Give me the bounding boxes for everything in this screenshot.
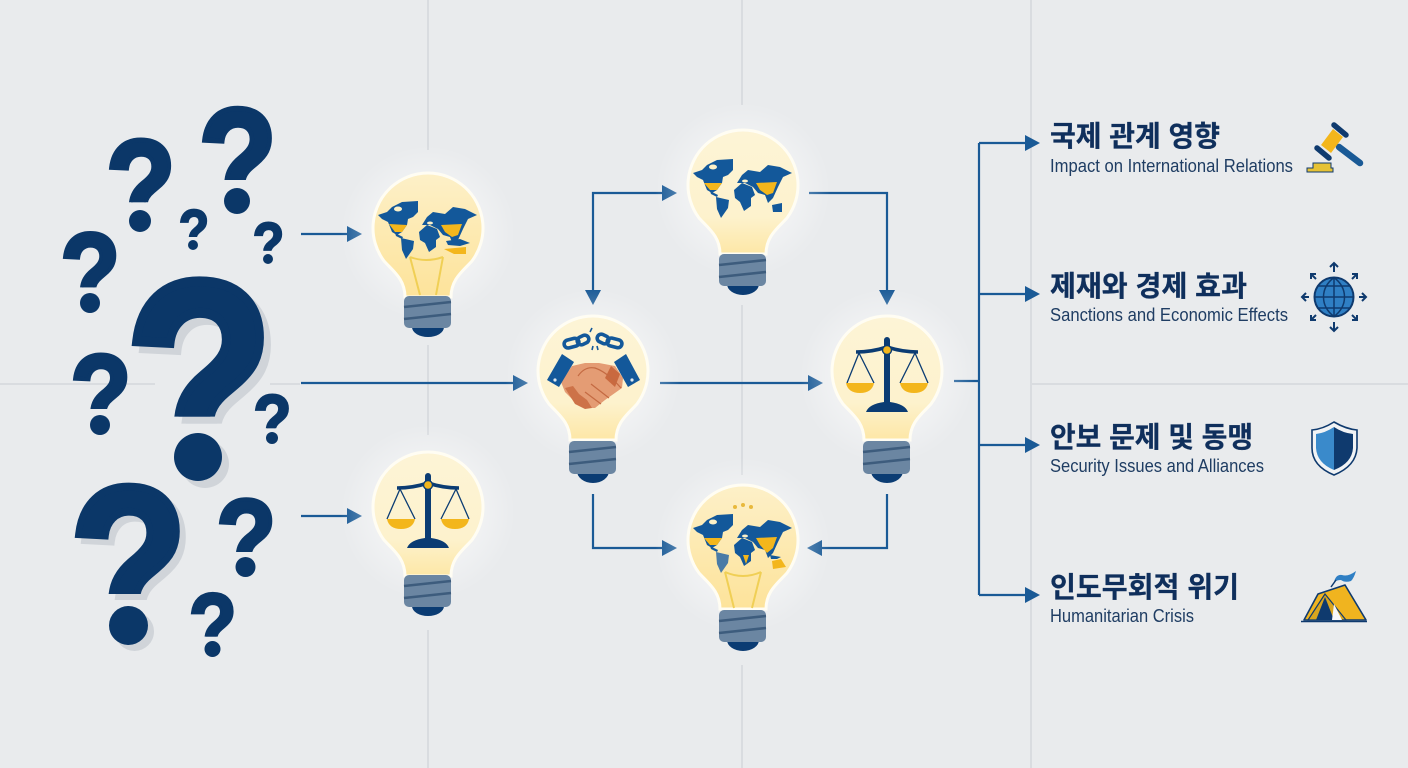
arrow: lower question to bulb — [301, 508, 362, 524]
bulb: scales of justice, lower left — [340, 424, 516, 616]
question mark: lower right — [218, 497, 272, 577]
subheading: Sanctions and Economic Effects — [1050, 305, 1288, 325]
question mark: left middle — [62, 231, 116, 313]
arrow: bottom loop right — [807, 494, 887, 556]
question mark: left lower — [72, 352, 128, 435]
heading: 안보 문제 및 동맹 — [1050, 422, 1253, 454]
question mark: small right: ? — [253, 211, 284, 277]
bulb: world map, bottom centre — [655, 457, 831, 651]
screw base — [719, 254, 766, 295]
subheading: Security Issues and Alliances — [1050, 456, 1264, 476]
question mark: left lower: ? — [70, 330, 131, 460]
question marks cluster — [62, 106, 289, 657]
bulb: handshake with broken chain — [505, 288, 681, 483]
screw base — [863, 441, 910, 483]
question mark: large lower with shadow: ? — [76, 445, 194, 699]
screw base — [569, 441, 616, 483]
world map — [378, 201, 477, 259]
bulb: scales of justice, right — [799, 288, 975, 483]
scales — [387, 473, 469, 548]
filament — [410, 257, 443, 295]
filament — [725, 572, 761, 608]
subheading: Humanitarian Crisis — [1050, 606, 1194, 626]
question mark: left middle: ? — [60, 210, 120, 338]
subheading: Impact on International Relations — [1050, 156, 1293, 176]
question mark: large lower with shadow — [74, 482, 186, 651]
bulb: world map with filament, upper left — [340, 145, 516, 337]
icon: shield — [1312, 422, 1357, 475]
screw base — [719, 610, 766, 651]
question mark: top right — [202, 106, 272, 214]
icon: tent with flag — [1301, 571, 1367, 622]
question mark: right of large — [254, 394, 289, 444]
question mark: small centre: ? — [179, 199, 209, 263]
broken chain — [563, 328, 623, 350]
arrow: upper question to bulb — [301, 226, 362, 242]
question mark: bottom — [190, 592, 234, 657]
arrow: handshake to scales — [660, 375, 823, 391]
question mark: large centre with shadow: ? — [125, 223, 274, 542]
question mark: lower right: ? — [216, 477, 276, 601]
outcome: international relations — [1050, 121, 1360, 176]
handshake — [547, 354, 640, 409]
question mark: small right — [254, 222, 282, 264]
screw base — [404, 575, 451, 616]
question mark: top right: ? — [198, 77, 277, 246]
outcome: sanctions — [1050, 263, 1366, 331]
heading: 제재와 경제 효과 — [1050, 271, 1247, 303]
arrow: top loop right — [809, 193, 895, 305]
bulb: world map, top centre — [655, 102, 831, 295]
arrow: top loop left — [585, 185, 677, 305]
arrow: centre question to handshake bulb — [301, 375, 528, 391]
icon: gavel — [1307, 125, 1360, 172]
question mark: right of large: ? — [253, 382, 291, 460]
screw base — [404, 296, 451, 337]
heading: 국제 관계 영향 — [1050, 121, 1220, 153]
question mark: large centre with shadow: ? — [132, 230, 281, 549]
outcome: security — [1050, 422, 1357, 476]
rays — [733, 503, 753, 509]
heading: 인도무회적 위기 — [1050, 572, 1239, 604]
icon: globe with arrows — [1302, 263, 1366, 331]
world map — [693, 159, 792, 218]
question mark: upper left — [108, 138, 172, 232]
question mark: small centre — [180, 208, 208, 250]
question mark: large centre with shadow — [132, 276, 271, 488]
outcome: humanitarian crisis — [1050, 571, 1367, 626]
arrow: bottom loop left — [593, 494, 677, 556]
arrow: branching tree to outcomes — [954, 135, 1040, 603]
question mark: bottom: ? — [189, 575, 237, 676]
scales — [846, 337, 928, 412]
question mark: large lower with shadow: ? — [70, 439, 188, 693]
question mark: upper left: ? — [106, 113, 176, 261]
world map — [693, 514, 792, 573]
